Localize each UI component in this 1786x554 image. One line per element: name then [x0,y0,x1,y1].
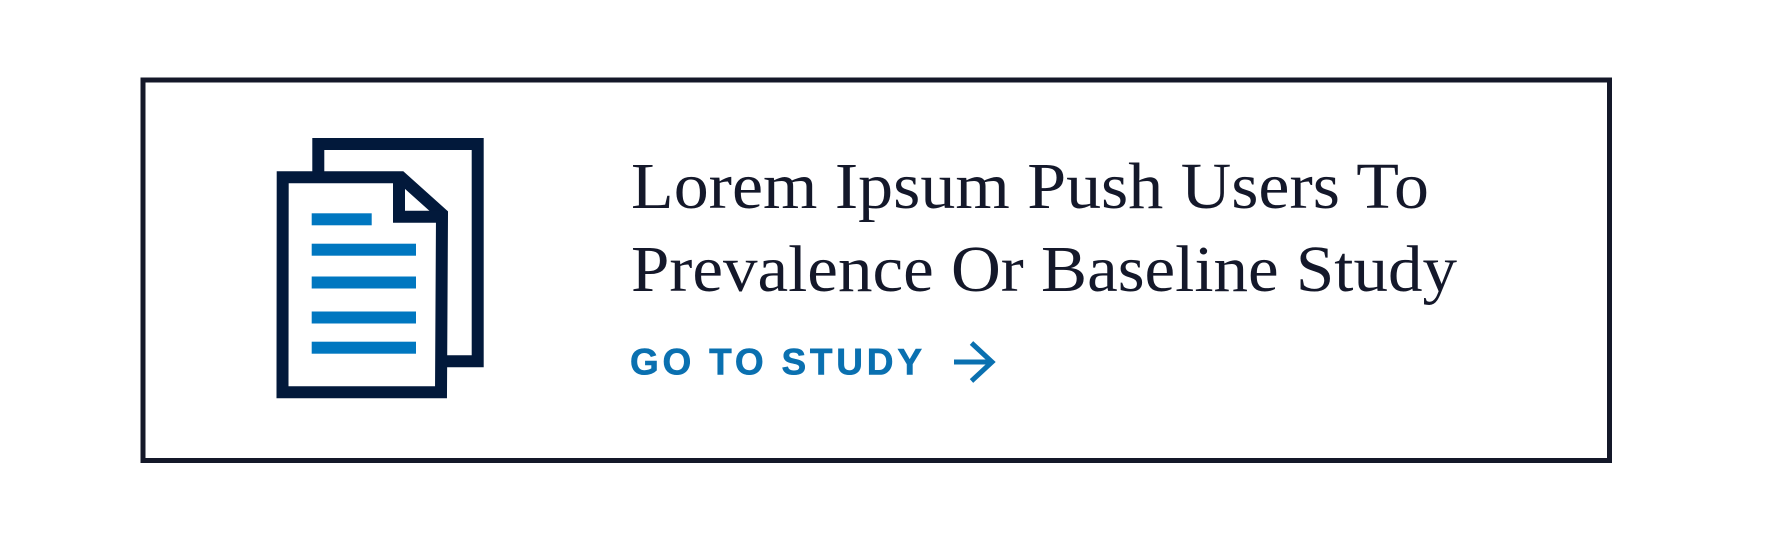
heading [631,150,1457,306]
icon: page fold [399,177,442,217]
link label: GO TO STUDY [630,342,922,382]
panel: bordered card [143,80,1610,460]
icon: front sheet with folded corner [282,177,442,392]
icon: arrow [954,343,992,381]
heading: Lorem Ipsum Push Users To [631,150,1429,223]
icon: text lines [312,213,416,354]
heading: Prevalence Or Baseline Study [631,233,1457,306]
icon: stacked documents [282,144,478,392]
icon: back sheet [318,144,478,361]
